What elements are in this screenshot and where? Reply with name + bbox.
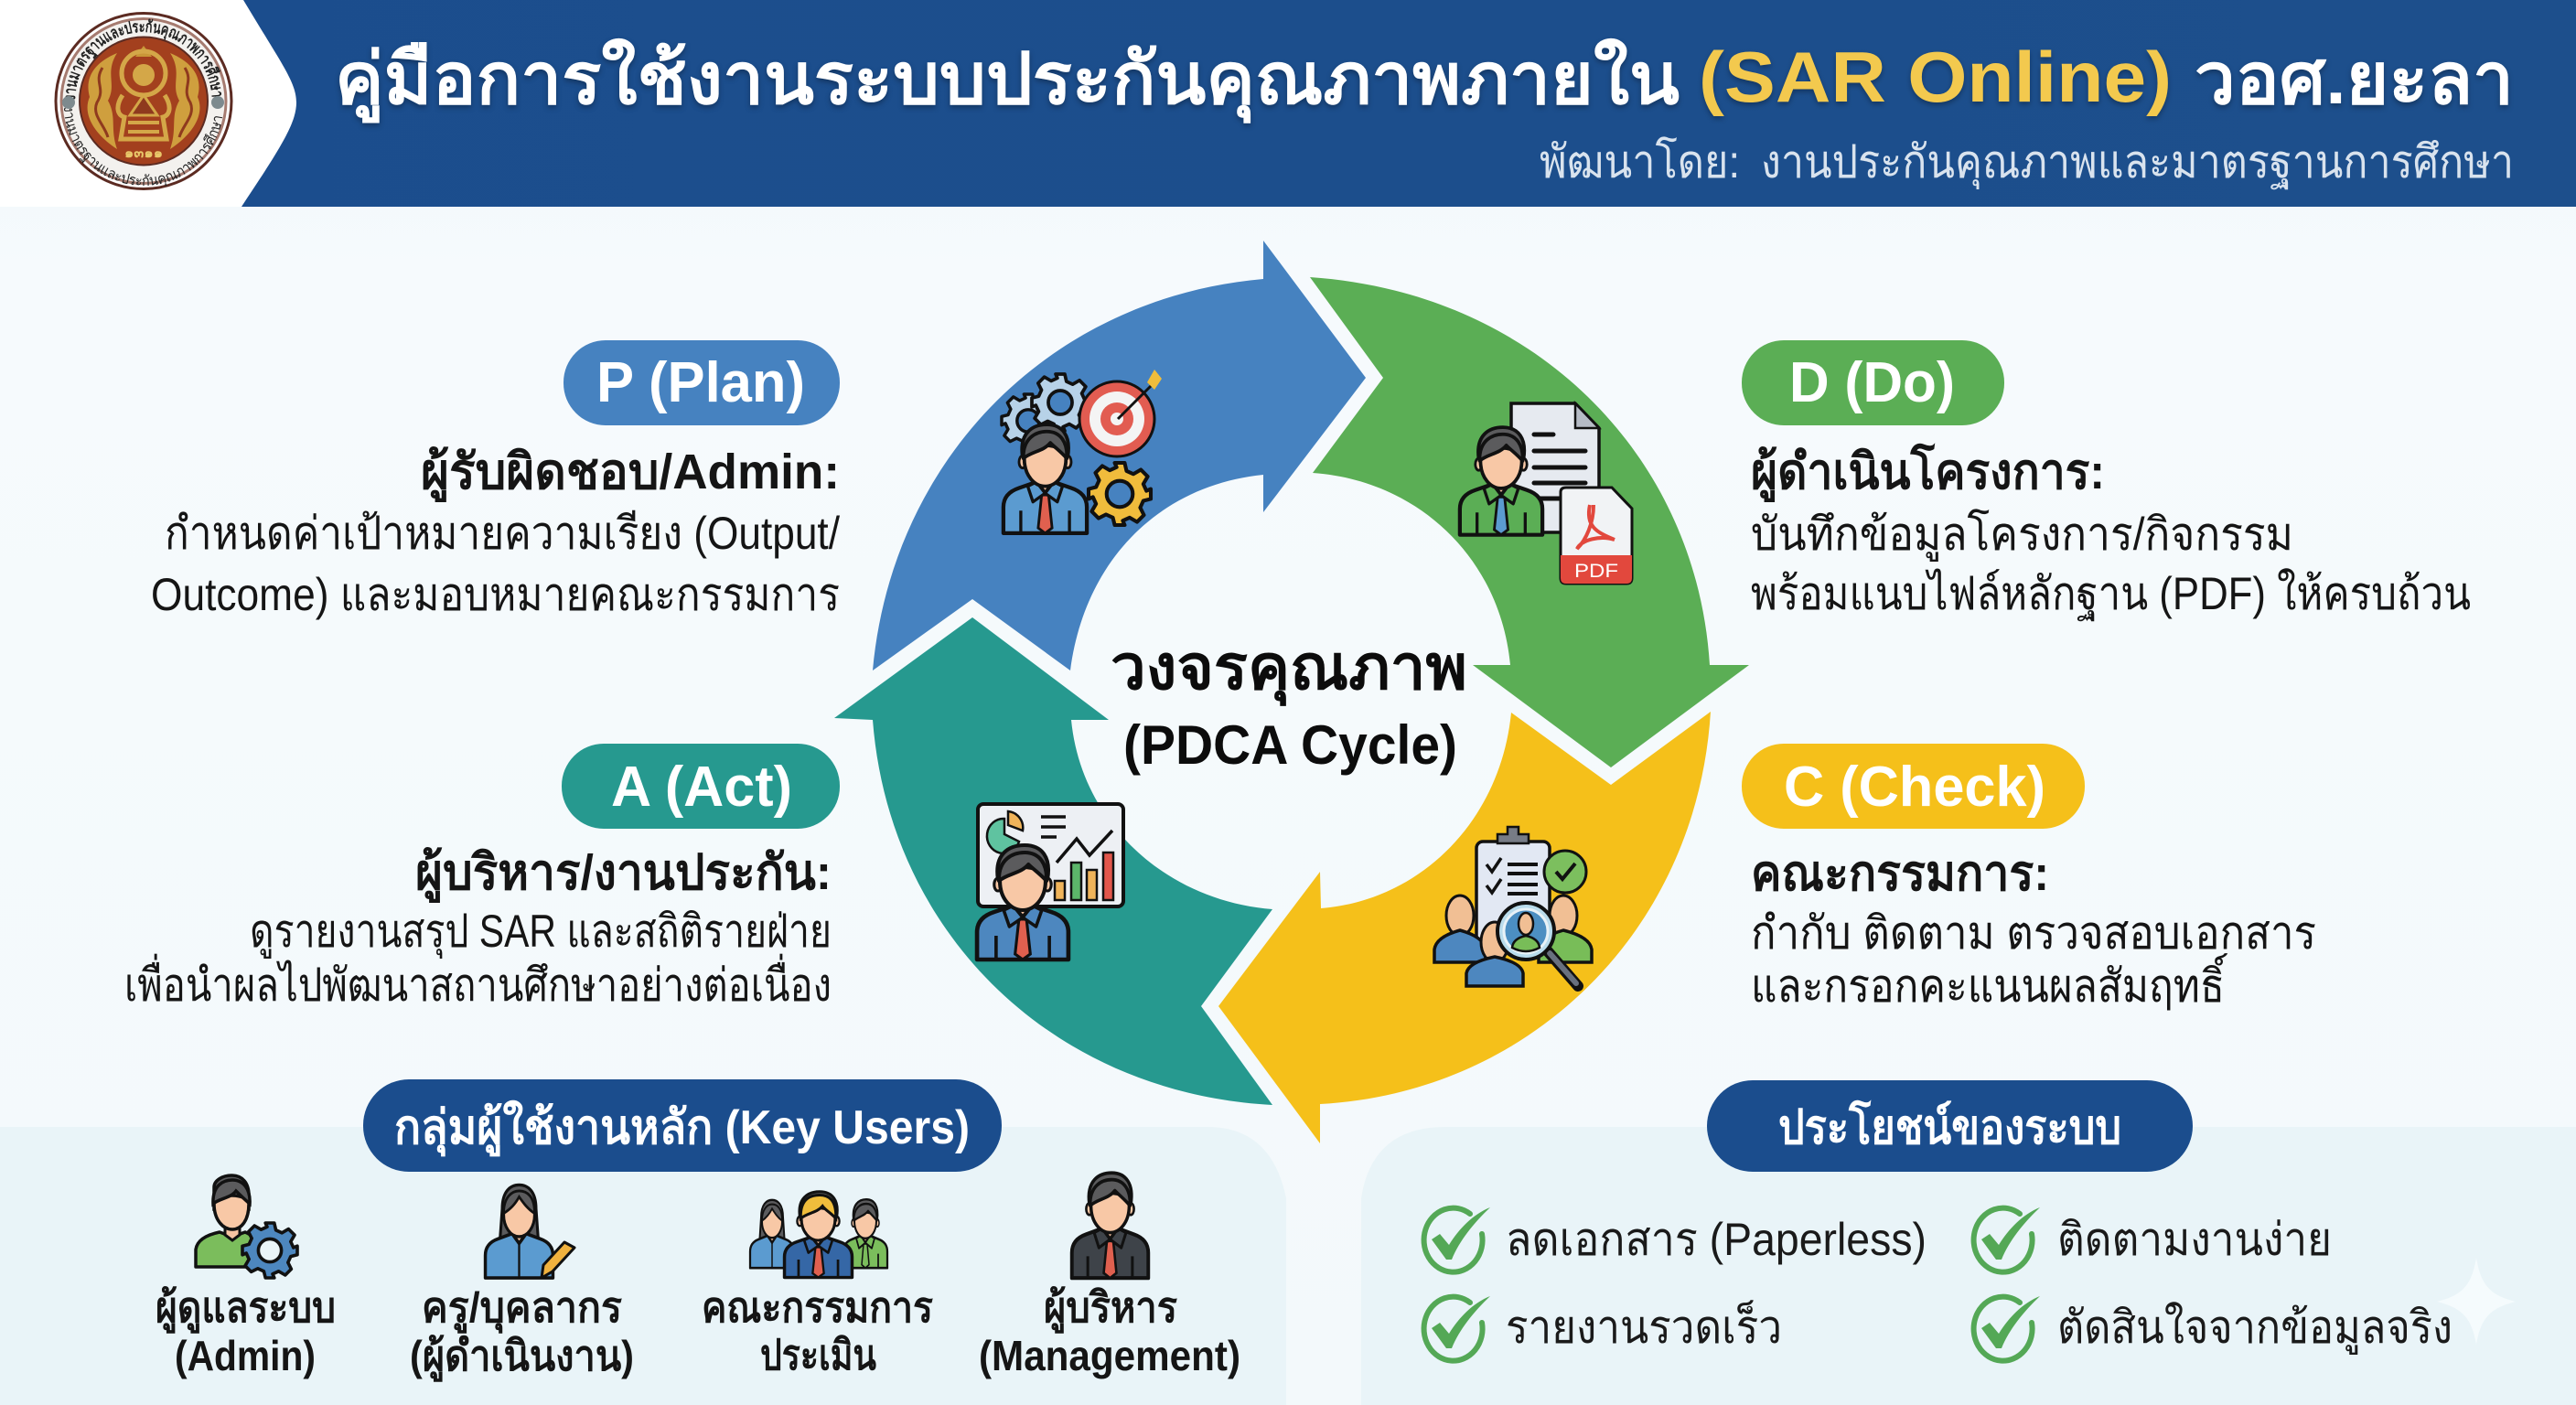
callout: C (Check): C (Check) [1784, 756, 2045, 819]
icon: do person with document and PDF [1460, 403, 1632, 584]
text block: Do description [1751, 443, 2471, 621]
text block: Act description: ดูรายงานสรุป SAR และสถิติรายฝ่าย [250, 906, 832, 959]
key user: Admin [156, 1175, 336, 1379]
text block: Act description: เพื่อนำผลไปพัฒนาสถานศึกษาอย่างต่อเนื่อง [124, 954, 832, 1011]
icon: college seal logo: งานมาตรฐานและประกันคุณภาพการศึกษา [64, 108, 223, 187]
benefit: data-driven decisions: ตัดสินใจจากข้อมูลจริง [2057, 1302, 2453, 1355]
key user: Management: ผู้บริหาร [1044, 1283, 1177, 1334]
key user: Management: (Management) [979, 1332, 1240, 1379]
text block: Check description: คณะกรรมการ: [1751, 846, 2049, 901]
key user: Evaluation committee: คณะกรรมการ [702, 1283, 933, 1331]
key user: Admin: ผู้ดูแลระบบ [156, 1283, 336, 1334]
arrow: Do [1310, 277, 1749, 767]
subtitle: พัฒนาโดย: [1540, 136, 1740, 188]
benefit: paperless: ลดเอกสาร (Paperless) [1506, 1214, 1927, 1265]
icon: college seal logo [55, 12, 232, 190]
panel: key users background [0, 1127, 1286, 1405]
callout: P (Plan) [564, 340, 840, 425]
text block: Check description [1751, 846, 2316, 1012]
callout: C (Check) [1742, 744, 2085, 829]
text block: Act description [124, 845, 832, 1011]
callout: P (Plan): P (Plan) [596, 351, 805, 414]
title [335, 37, 2514, 123]
arrow: Act [834, 617, 1272, 1105]
title: วอศ.ยะลา [2195, 38, 2514, 119]
text block: Plan description [151, 445, 840, 620]
key user: Teacher: ครู/บุคลากร [422, 1283, 622, 1334]
heading: key users: กลุ่มผู้ใช้งานหลัก (Key Users) [394, 1099, 970, 1157]
icon: admin person with gear [196, 1175, 297, 1278]
icon: college seal logo: งานมาตรฐานและประกันคุณภาพการศึกษา [66, 18, 221, 99]
text block: Act description: ผู้บริหาร/งานประกัน: [415, 845, 832, 903]
heading: benefits: ประโยชน์ของระบบ [1778, 1099, 2121, 1154]
benefit: easy tracking [1974, 1207, 2332, 1272]
key user: Teacher: (ผู้ดำเนินงาน) [410, 1332, 634, 1382]
icon: committee group [750, 1192, 887, 1277]
heading: key users [363, 1079, 1002, 1172]
icon: plan person, target and gears [1002, 370, 1162, 533]
icon: do person with document and PDF: PDF [1574, 561, 1618, 582]
benefit: data-driven decisions [1974, 1296, 2453, 1361]
text block: Check description: กำกับ ติดตาม ตรวจสอบเอกสาร [1751, 907, 2316, 959]
text block: Check description: และกรอกคะแนนผลสัมฤทธิ์ [1751, 952, 2227, 1012]
header banner [0, 0, 2576, 207]
arrow: Plan [873, 241, 1366, 670]
PDCA cycle arrows [834, 241, 1749, 1143]
center title: (PDCA Cycle) [1123, 714, 1457, 776]
arrow: Check [1218, 712, 1711, 1143]
key user: Admin: (Admin) [175, 1332, 316, 1379]
panel: benefits background [1361, 1127, 2576, 1405]
text block: Plan description: กำหนดค่าเป้าหมายความเรียง (Output/ [165, 508, 840, 559]
key user: Evaluation committee: ประเมิน [760, 1331, 876, 1378]
text block: Do description: พร้อมแนบไฟล์หลักฐาน (PDF) ให้ครบถ้วน [1751, 568, 2471, 621]
key user: Evaluation committee [702, 1192, 933, 1378]
text block: Do description: ผู้ดำเนินโครงการ: [1751, 443, 2105, 502]
callout: D (Do): D (Do) [1789, 351, 1955, 414]
icon: teacher with pencil [486, 1185, 574, 1278]
title: คู่มือการใช้งานระบบประกันคุณภาพภายใน [335, 38, 1680, 123]
heading: benefits [1707, 1080, 2193, 1172]
center title [1111, 633, 1467, 776]
text block: Plan description: ผู้รับผิดชอบ/Admin: [421, 445, 840, 502]
icon: act person with dashboard board [977, 804, 1123, 960]
callout: A (Act): A (Act) [611, 756, 792, 819]
benefit: fast reports [1424, 1296, 1782, 1361]
benefit: fast reports: รายงานรวดเร็ว [1506, 1300, 1782, 1353]
key user: Management [979, 1173, 1240, 1379]
callout: A (Act) [562, 744, 840, 829]
key user: Teacher [410, 1185, 634, 1382]
title: (SAR Online) [1699, 37, 2172, 117]
text block: Do description: บันทึกข้อมูลโครงการ/กิจกรรม [1751, 509, 2293, 562]
center title: วงจรคุณภาพ [1111, 633, 1467, 706]
icon: college seal logo: ๑๓๑๑ [124, 145, 163, 160]
icon: watermark sparkle [2437, 1258, 2516, 1345]
callout: D (Do) [1742, 340, 2004, 425]
icon: check committee, clipboard and magnifier [1434, 827, 1592, 986]
icon: executive in dark suit [1072, 1173, 1148, 1278]
benefit: paperless [1424, 1207, 1927, 1272]
benefit: easy tracking: ติดตามงานง่าย [2057, 1214, 2332, 1265]
text block: Plan description: Outcome) และมอบหมายคณะกรรมการ [151, 569, 840, 620]
